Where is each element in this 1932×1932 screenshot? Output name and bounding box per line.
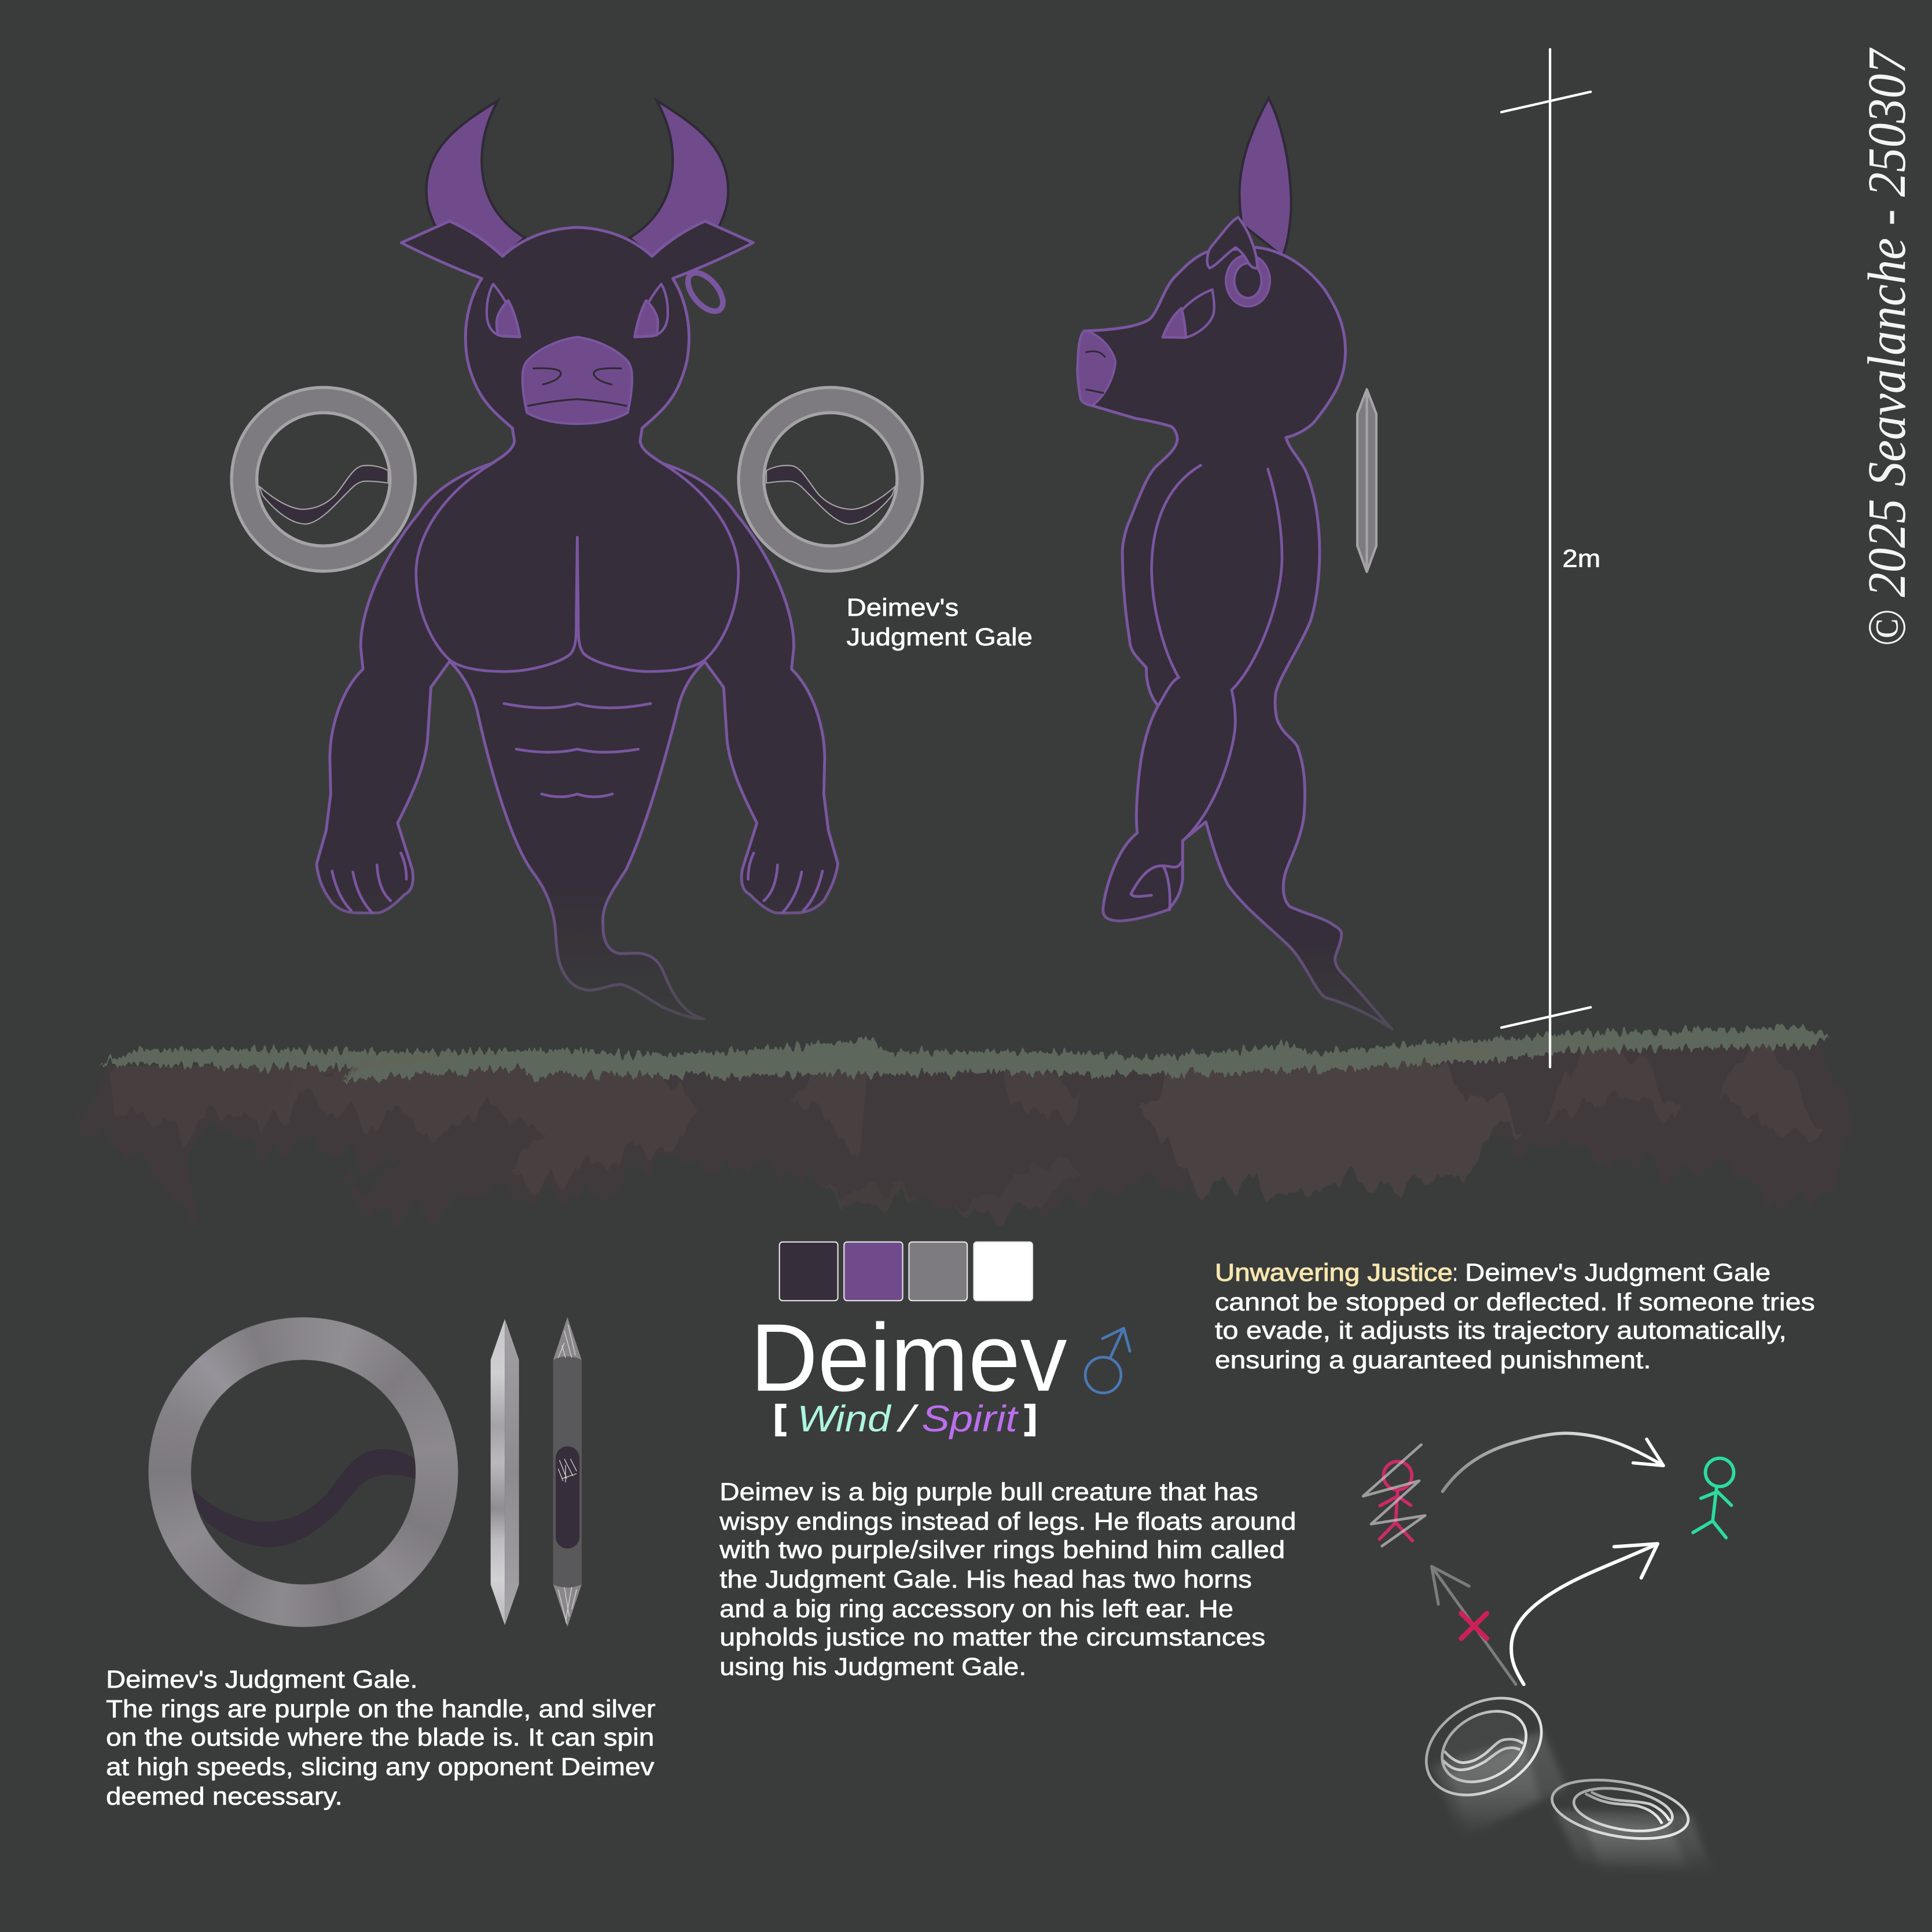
elements: Wind / Spirit <box>774 1398 1037 1439</box>
diagram: lower curved arrow <box>1511 1544 1658 1684</box>
side view: ear ring <box>1226 255 1270 307</box>
text block: description <box>719 1478 1296 1681</box>
diagram: upper curved arrow <box>1442 1433 1663 1492</box>
icon: male symbol <box>1085 1328 1130 1393</box>
text block: ability: Deimev's Judgment Gale <box>1465 1259 1771 1287</box>
diagram: blocked straight arrow <box>1431 1566 1516 1684</box>
detail blade: side <box>491 1319 519 1625</box>
diagram: spinning ring one <box>1409 1678 1567 1838</box>
label: Deimev's Judgment Gale: Deimev's <box>847 594 958 622</box>
text block: description: wispy endings instead of legs. He floats around <box>719 1508 1296 1536</box>
text block: ability: cannot be stopped or deflected. If someone tries <box>1215 1288 1815 1316</box>
front view: horns <box>427 101 728 256</box>
label: Deimev's Judgment Gale: Judgment Gale <box>847 623 1033 651</box>
text block: ability: : <box>1453 1259 1457 1287</box>
text block: description: the Judgment Gale. His head has two horns <box>719 1566 1252 1593</box>
text block: description: upholds justice no matter the circumstances <box>719 1624 1265 1651</box>
elements: Wind / Spirit: Wind <box>797 1398 892 1439</box>
text block: weapon: at high speeds, slicing any opponent Deimev <box>106 1753 655 1781</box>
side view: body <box>1078 247 1392 1029</box>
ground: soil <box>75 1029 1853 1221</box>
text block: weapon <box>106 1666 656 1810</box>
elements: Wind / Spirit: Spirit <box>921 1398 1019 1439</box>
side view: inner lines <box>1131 465 1282 910</box>
detail ring: silver band <box>148 1317 458 1628</box>
front view: snout <box>523 337 632 424</box>
front view: eyes <box>487 284 668 337</box>
colour swatches <box>780 1242 1033 1301</box>
side view: ring seen edge-on <box>1357 390 1376 572</box>
text block: description: with two purple/silver rings behind him called <box>719 1536 1285 1564</box>
height label: 2m <box>1562 545 1600 572</box>
front view: right ring <box>751 400 910 559</box>
text block: description: using his Judgment Gale. <box>719 1653 1026 1681</box>
text block: ability: ensuring a guaranteed punishment. <box>1215 1346 1651 1374</box>
text block: ability <box>1215 1259 1815 1374</box>
text block: ability: to evade, it adjusts its trajectory automatically, <box>1215 1317 1787 1345</box>
front view: chest and abs lines <box>416 463 739 797</box>
text block: weapon: The rings are purple on the handle, and silver <box>106 1695 656 1723</box>
elements: Wind / Spirit: [ <box>774 1399 786 1436</box>
front view: fingers <box>332 853 822 913</box>
side view: ear <box>1207 218 1258 268</box>
diagram: target figure with dodge zigzag <box>1363 1445 1425 1546</box>
side view: eye <box>1163 289 1214 337</box>
text block: weapon: on the outside where the blade is. It can spin <box>106 1724 654 1751</box>
elements: Wind / Spirit: ] <box>1024 1399 1037 1436</box>
label: Deimev's Judgment Gale <box>847 594 1033 651</box>
elements: Wind / Spirit: / <box>896 1398 920 1439</box>
front view: earring <box>681 267 729 317</box>
detail blade: back with handle slot <box>553 1317 582 1627</box>
side view: snout <box>1078 331 1115 406</box>
front view: body <box>317 221 838 1019</box>
height ruler <box>1501 49 1591 1067</box>
text block: description: Deimev is a big purple bull creature that has <box>719 1478 1258 1506</box>
ground: grass <box>98 1027 1830 1081</box>
diagram: spinning ring two <box>1548 1771 1713 1873</box>
front view: left ring <box>244 400 403 559</box>
detail ring ribbon <box>191 1449 416 1547</box>
title: Deimev <box>750 1305 1067 1412</box>
text block: ability: Unwavering Justice <box>1215 1259 1453 1287</box>
text block: description: and a big ring accessory on his left ear. He <box>719 1595 1233 1623</box>
diagram: red cross <box>1461 1613 1487 1639</box>
side view: horn <box>1239 98 1291 256</box>
diagram: evaded figure <box>1693 1458 1733 1538</box>
copyright: © 2025 Seavalanche - 250307 <box>1857 47 1917 647</box>
text block: weapon: deemed necessary. <box>106 1783 343 1810</box>
text block: weapon: Deimev's Judgment Gale. <box>106 1666 418 1694</box>
